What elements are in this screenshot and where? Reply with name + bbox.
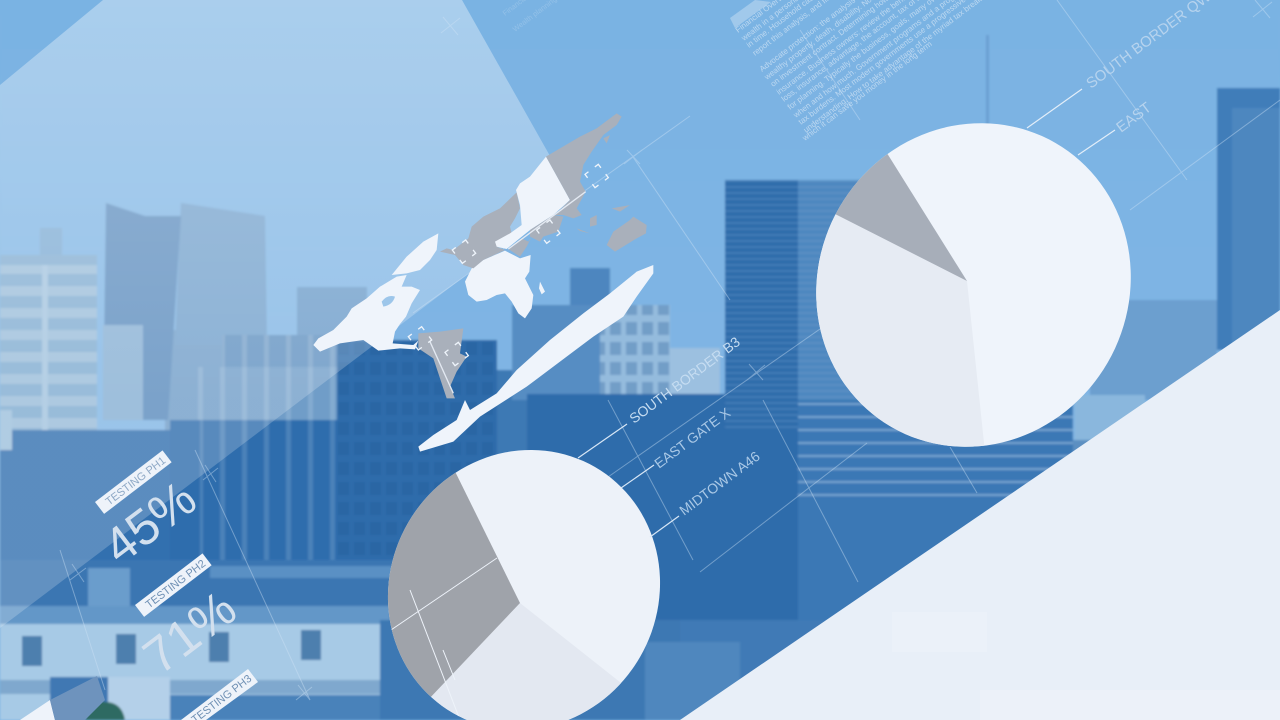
pie chart: lower centre: [388, 450, 660, 720]
map: Europe: [440, 192, 520, 268]
world map: [313, 113, 653, 452]
map: route line: [430, 342, 453, 393]
pie slice: dark grey: [836, 154, 967, 281]
map: Americas and Antarctica: [313, 233, 653, 452]
location label: East: EAST: [1113, 99, 1155, 136]
value: 45%: 45%: [93, 470, 207, 575]
map: Antarctica: [418, 265, 653, 452]
map: Asia highlighted: [495, 157, 570, 249]
map: Australia: [607, 217, 647, 252]
map: Africa: [465, 251, 533, 318]
pie slice: dark grey: [388, 472, 520, 697]
location label: South Border QW: [1027, 0, 1215, 128]
map: North America: [313, 275, 420, 352]
location label: South Border B3: [578, 333, 743, 458]
location label: South Border B3: SOUTH BORDER B3: [626, 333, 743, 426]
map: Greenland: [392, 233, 438, 275]
map: target brackets: [408, 164, 608, 366]
location label: East: [1078, 99, 1155, 155]
translucent light panel: [0, 0, 572, 628]
location label: Midtown A46: [650, 448, 763, 537]
map: islands: [577, 135, 630, 233]
stat: testing PH1 45%: [93, 450, 207, 575]
corner shards: [20, 676, 105, 720]
location label: Midtown A46: MIDTOWN A46: [676, 448, 763, 518]
map: Arabia: [508, 237, 532, 257]
map: route line: [508, 192, 586, 249]
paragraph text block: [730, 0, 1032, 143]
pie slice: light grey: [431, 604, 621, 720]
tag: testing PH1: TESTING PH1: [104, 455, 168, 508]
pie slice: light grey: [816, 214, 984, 447]
map: Asia: [546, 113, 622, 218]
location label: East Gate X: [621, 404, 734, 488]
map: South America: [418, 328, 467, 398]
value: 71%: 71%: [133, 580, 247, 685]
map: India: [530, 215, 563, 242]
map: Madagascar: [539, 282, 545, 294]
white diagonal panel: [680, 310, 1280, 720]
location label: East Gate X: EAST GATE X: [651, 404, 734, 471]
pie chart: upper right: [816, 123, 1131, 447]
stat: testing PH2 71%: [133, 553, 247, 685]
paragraph text block: which it can save you money in the long term: [800, 39, 934, 143]
tag: testing PH2: TESTING PH2: [144, 558, 208, 611]
map: Old World: [440, 113, 647, 318]
